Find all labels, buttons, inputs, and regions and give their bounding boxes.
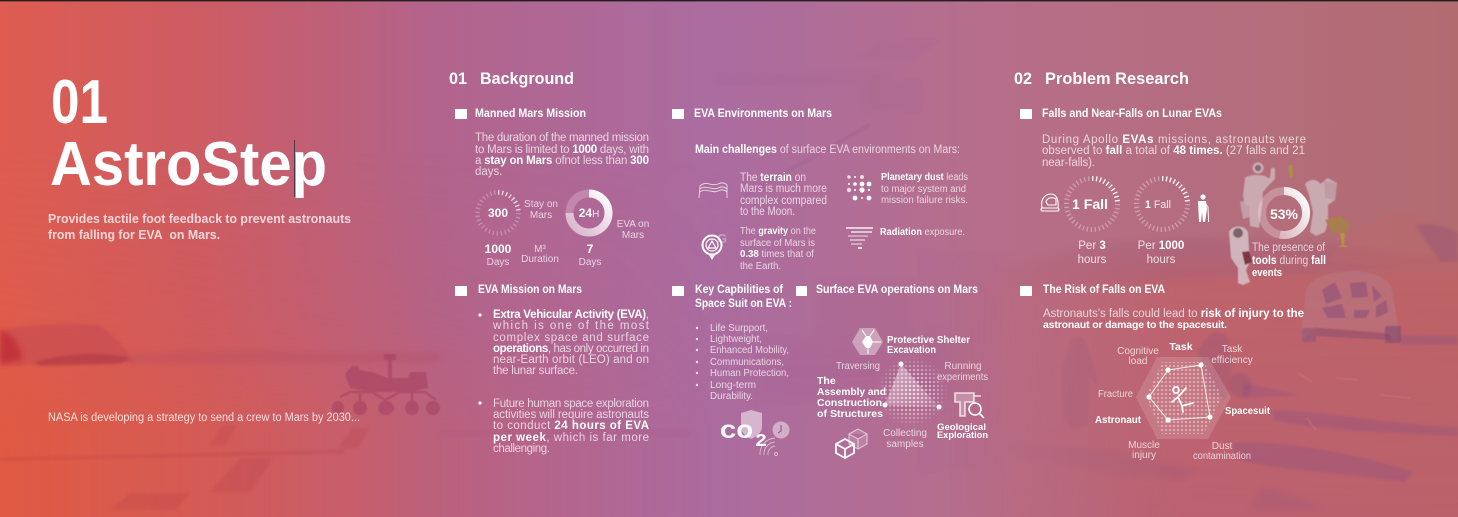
radar labels: Dust — [1212, 441, 1233, 452]
body text: days. — [475, 166, 502, 178]
icon: gravity — [702, 231, 727, 260]
gauge: 300 days stay: Mars — [530, 210, 552, 221]
body text: Astronauts's falls could lead to risk of injury to the — [1043, 308, 1304, 320]
title number: 01 — [51, 68, 108, 137]
heading: Falls and Near-Falls on Lunar EVAs — [1042, 106, 1222, 120]
label: collecting samples: samples — [886, 439, 924, 450]
bullet square — [796, 286, 807, 296]
terrain text — [740, 172, 827, 218]
icon: CO2 shield clock signal — [720, 410, 790, 456]
intro text: Main challenges of surface EVA environments on Mars: — [695, 144, 960, 156]
heading: 01 Background: 01 — [449, 69, 467, 88]
bullet text two: to conduct 24 hours of EVA — [493, 420, 649, 432]
capability list: Long-term — [710, 380, 756, 391]
donut: 24H EVA: EVA on — [617, 219, 649, 230]
gravity text: The gravity on the — [740, 226, 816, 237]
bullet square — [1020, 286, 1032, 296]
radar labels: Muscle — [1128, 440, 1160, 451]
gauge: 1 fall per 1000 hours — [1136, 178, 1188, 266]
label: assembly: Construction — [817, 397, 882, 409]
footnote: NASA is developing a strategy to send a crew to Mars by 2030... — [48, 412, 360, 424]
icon: CO2 shield clock signal: 2 — [755, 432, 767, 452]
label: collecting samples: Collecting — [883, 428, 927, 439]
radar labels: Astronaut — [1095, 414, 1141, 426]
bullet square — [1020, 109, 1032, 119]
dust text: mission failure risks. — [881, 195, 968, 206]
icon: CO2 shield clock signal: CO — [720, 422, 753, 445]
gravity text — [740, 226, 816, 272]
capability list — [696, 323, 789, 402]
terrain text: to the Moon. — [740, 206, 795, 218]
label: assembly: Assembly and — [817, 386, 886, 398]
subtitle: from falling for EVA on Mars. — [48, 228, 220, 242]
gravity text: surface of Mars is — [740, 238, 815, 249]
panel: EVA environments — [672, 106, 968, 272]
gauge: 1 fall per 3 hours: hours — [1078, 254, 1107, 266]
chart: risk radar — [1136, 357, 1231, 439]
bullet text two: per week, which is far more — [493, 432, 649, 444]
stat labels: M³ — [534, 244, 546, 255]
donut caption: The presence of — [1252, 242, 1326, 254]
bullet text one: which is one of the most — [492, 320, 650, 332]
chart: operations radar — [878, 358, 946, 426]
panel: key capabilities of space suit — [672, 282, 792, 456]
label: protective shelter: Protective Shelter — [887, 334, 970, 346]
capability list: Life Surpport, — [710, 323, 768, 334]
bullet text one: operations, has only occurred in — [493, 343, 649, 355]
radar labels: Spacesuit — [1225, 405, 1270, 417]
text cursor — [294, 140, 295, 197]
panel: manned mars mission — [455, 106, 649, 268]
stat labels — [485, 242, 601, 268]
stat labels: 1000 — [485, 242, 512, 256]
gauge: 1 fall per 1000 hours: hours — [1147, 254, 1176, 266]
subtitle: Provides tactile foot feedback to prevent astronauts — [48, 212, 351, 226]
heading — [695, 282, 792, 310]
bullet text one: the lunar surface. — [493, 365, 578, 377]
label: protective shelter — [887, 334, 970, 356]
heading: Key Capbilities of — [695, 282, 784, 296]
label: assembly — [817, 375, 886, 420]
bullet text one — [478, 309, 650, 377]
dust text: Planetary dust leads — [881, 172, 968, 183]
radiation text: Radiation exposure. — [880, 227, 965, 238]
label: running experiments: experiments — [937, 372, 988, 383]
bullet text two: Future human space exploration — [493, 398, 649, 410]
gauge: 1 fall per 3 hours: 1 Fall — [1072, 196, 1108, 212]
bullet text one: Extra Vehicular Activity (EVA), — [493, 309, 649, 321]
icon: mars rover silhouette — [332, 354, 440, 415]
illustration: astronauts and tools — [1229, 162, 1350, 285]
bullet square — [672, 109, 684, 119]
donut: 53 percent — [1262, 191, 1306, 235]
radar labels: load — [1129, 356, 1147, 367]
panel: falls and near-falls — [1020, 106, 1350, 285]
body text: to Mars is limited to 1000 days, with — [475, 144, 649, 156]
panel: surface EVA operations — [796, 282, 988, 458]
radar labels: injury — [1132, 450, 1156, 461]
stat labels: Days — [487, 257, 509, 268]
label: geological exploration: Geological — [937, 422, 986, 433]
icon: sample cubes — [836, 429, 867, 458]
icon: gravity: G — [717, 231, 727, 246]
bullet text two — [478, 398, 649, 455]
bullet square — [455, 109, 467, 119]
label: collecting samples — [883, 428, 927, 450]
body text: During Apollo EVAs missions, astronauts were — [1042, 134, 1306, 146]
dust text — [881, 172, 968, 206]
label: geological exploration — [937, 422, 988, 441]
heading: EVA Mission on Mars — [478, 282, 582, 296]
subtitle — [48, 212, 351, 242]
terrain text: complex compared — [740, 195, 827, 207]
label: assembly: of Structures — [817, 408, 883, 420]
icon: helmet — [1041, 194, 1059, 211]
bullet text two: challenging. — [493, 443, 550, 455]
stat labels: Duration — [521, 254, 559, 265]
heading: 02 Problem Research: Problem Research — [1045, 69, 1189, 88]
gauge: 1 fall per 1000 hours: 1 Fall — [1145, 199, 1171, 211]
heading: Space Suit on EVA : — [695, 296, 792, 310]
heading: The Risk of Falls on EVA — [1043, 282, 1165, 296]
donut: 24H EVA: Mars — [622, 230, 644, 241]
heading: Manned Mars Mission — [475, 106, 586, 120]
radar labels: Task — [1222, 344, 1243, 355]
donut: 24H EVA: 24H — [579, 206, 599, 220]
icon: terrain — [699, 183, 727, 198]
label: traversing: Traversing — [836, 361, 880, 372]
label: geological exploration: Exploration — [937, 430, 988, 441]
body text: The duration of the manned mission — [475, 132, 649, 144]
label: protective shelter: Excavation — [887, 344, 936, 356]
heading: 01 Background: Background — [480, 69, 574, 88]
label: running experiments: Running — [944, 361, 982, 372]
capability list: Durability. — [710, 391, 753, 402]
radar labels: Task — [1169, 341, 1193, 353]
icon: shelter hexagon — [852, 328, 883, 355]
donut: 24H EVA — [570, 194, 649, 241]
donut caption: tools during fall — [1252, 255, 1326, 267]
body text: near-falls). — [1042, 157, 1095, 169]
donut caption — [1252, 242, 1326, 279]
capability list: Enhanced Mobility, — [710, 345, 789, 356]
radar labels: contamination — [1193, 451, 1251, 462]
bullet text two: activities will require astronauts — [493, 409, 649, 421]
panel: title block — [48, 68, 360, 424]
icon: radiation — [846, 228, 873, 248]
label: assembly: The — [817, 375, 836, 387]
terrain text: The terrain on — [740, 172, 806, 184]
bullet square — [455, 286, 467, 296]
title: AstroStep — [50, 130, 327, 199]
stat labels: Days — [579, 257, 601, 268]
body text — [1043, 308, 1304, 331]
label: running experiments — [937, 361, 988, 383]
radar labels: efficiency — [1211, 355, 1253, 366]
icon: planetary dust — [847, 175, 871, 200]
gauge: 300 days stay — [478, 192, 558, 234]
gauge: 1 fall per 3 hours: Per 3 — [1078, 240, 1106, 252]
icon: geological tool — [955, 393, 984, 418]
bullet square — [672, 286, 684, 296]
radar labels: Fracture — [1098, 389, 1133, 400]
donut: 53 percent: 53% — [1270, 206, 1299, 222]
body text — [475, 132, 649, 178]
body text: a stay on Mars ofnot less than 300 — [475, 155, 649, 167]
dust text: to major system and — [881, 184, 966, 195]
icon: elderly person — [1198, 194, 1209, 222]
capability list: Communications, — [710, 357, 784, 368]
body text: observed to fall a total of 48 times. (27 falls and 21 — [1042, 145, 1305, 157]
bullet text one: near-Earth orbit (LEO) and on — [493, 354, 649, 366]
gravity text: the Earth. — [740, 261, 781, 272]
donut caption: events — [1252, 267, 1282, 279]
gauge: 1 fall per 3 hours — [1066, 178, 1118, 266]
panel: EVA mission on Mars — [455, 282, 650, 455]
bullet text one: complex space and surface — [493, 332, 649, 344]
gauge: 300 days stay: Stay on — [524, 199, 558, 210]
body text — [1042, 134, 1306, 169]
stat labels: 7 — [587, 242, 594, 256]
radar labels — [1095, 341, 1270, 462]
radar labels: Cognitive — [1117, 346, 1159, 357]
capability list: Human Protection, — [710, 368, 789, 379]
gauge: 1 fall per 1000 hours: Per 1000 — [1138, 240, 1184, 252]
gauge: 300 days stay: 300 — [488, 206, 508, 220]
heading: EVA Environments on Mars — [694, 106, 832, 120]
body text: astronaut or damage to the spacesuit. — [1043, 319, 1227, 331]
icon: falling figure — [1172, 387, 1193, 412]
heading: 02 Problem Research: 02 — [1014, 69, 1032, 88]
panel: risk of falls — [1020, 282, 1304, 462]
capability list: Lightweight, — [710, 334, 762, 345]
gravity text: 0.38 times that of — [740, 249, 814, 260]
terrain text: Mars is much more — [740, 183, 827, 195]
heading: Surface EVA operations on Mars — [816, 282, 978, 296]
